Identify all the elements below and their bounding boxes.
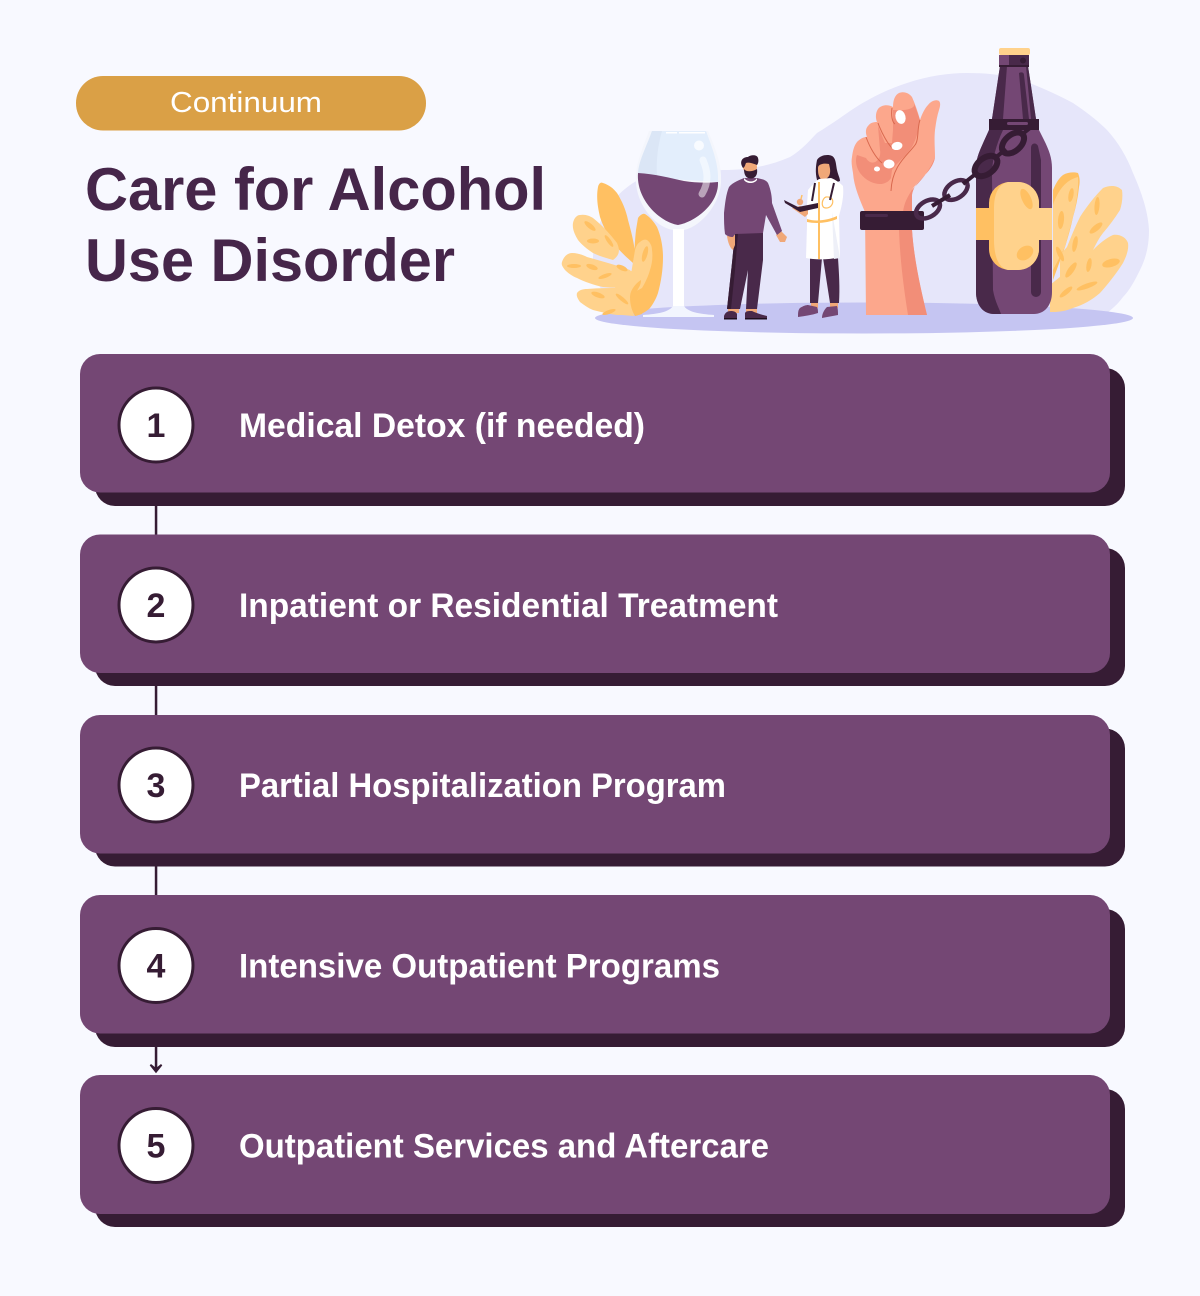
icon: beer bottle	[976, 48, 1052, 314]
ground shadow	[595, 302, 1133, 334]
step 4: Intensive Outpatient Programs: 4	[147, 948, 166, 986]
step 2: Inpatient or Residential Treatment: Inpatient or Residential Treatment	[239, 587, 778, 625]
step 1: Medical Detox	[80, 354, 1125, 506]
illustration: alcohol use disorder scene	[562, 48, 1149, 334]
step 5: Outpatient Services and Aftercare	[80, 1075, 1125, 1227]
icon: wine glass	[636, 131, 721, 317]
step 1: Medical Detox: Medical Detox (if needed)	[239, 407, 645, 445]
badge: Continuum	[76, 76, 426, 130]
badge: Continuum: Continuum	[170, 87, 322, 119]
step 4: Intensive Outpatient Programs: Intensive Outpatient Programs	[239, 948, 720, 986]
title: Care for Alcohol	[85, 156, 546, 223]
connector: step 2 to 3	[155, 686, 157, 715]
background blob	[593, 73, 1149, 313]
connector: step 3 to 4	[155, 866, 157, 895]
step 2: Inpatient or Residential Treatment: 2	[147, 587, 165, 625]
step 3: Partial Hospitalization Program: Partial Hospitalization Program	[239, 767, 726, 805]
icon: left plant	[562, 183, 663, 316]
connector: step 1 to 2	[155, 506, 157, 535]
step 4: Intensive Outpatient Programs	[80, 895, 1125, 1047]
icon: doctor with clipboard	[784, 155, 843, 318]
title: Use Disorder	[85, 227, 455, 294]
step 5: Outpatient Services and Aftercare: Outpatient Services and Aftercare	[239, 1128, 769, 1166]
icon: fist and arm	[852, 92, 940, 315]
step 3: Partial Hospitalization Program	[80, 715, 1125, 866]
step 2: Inpatient or Residential Treatment	[80, 534, 1125, 686]
icon: right plant	[1050, 172, 1128, 312]
step 5: Outpatient Services and Aftercare: 5	[147, 1128, 165, 1166]
arrow: step 4 to 5	[150, 1047, 162, 1073]
step 1: Medical Detox: 1	[147, 407, 165, 445]
title	[85, 156, 546, 294]
step 3: Partial Hospitalization Program: 3	[147, 767, 165, 805]
icon: wrist cuff and chain	[860, 124, 1035, 230]
icon: man patient	[724, 155, 787, 320]
